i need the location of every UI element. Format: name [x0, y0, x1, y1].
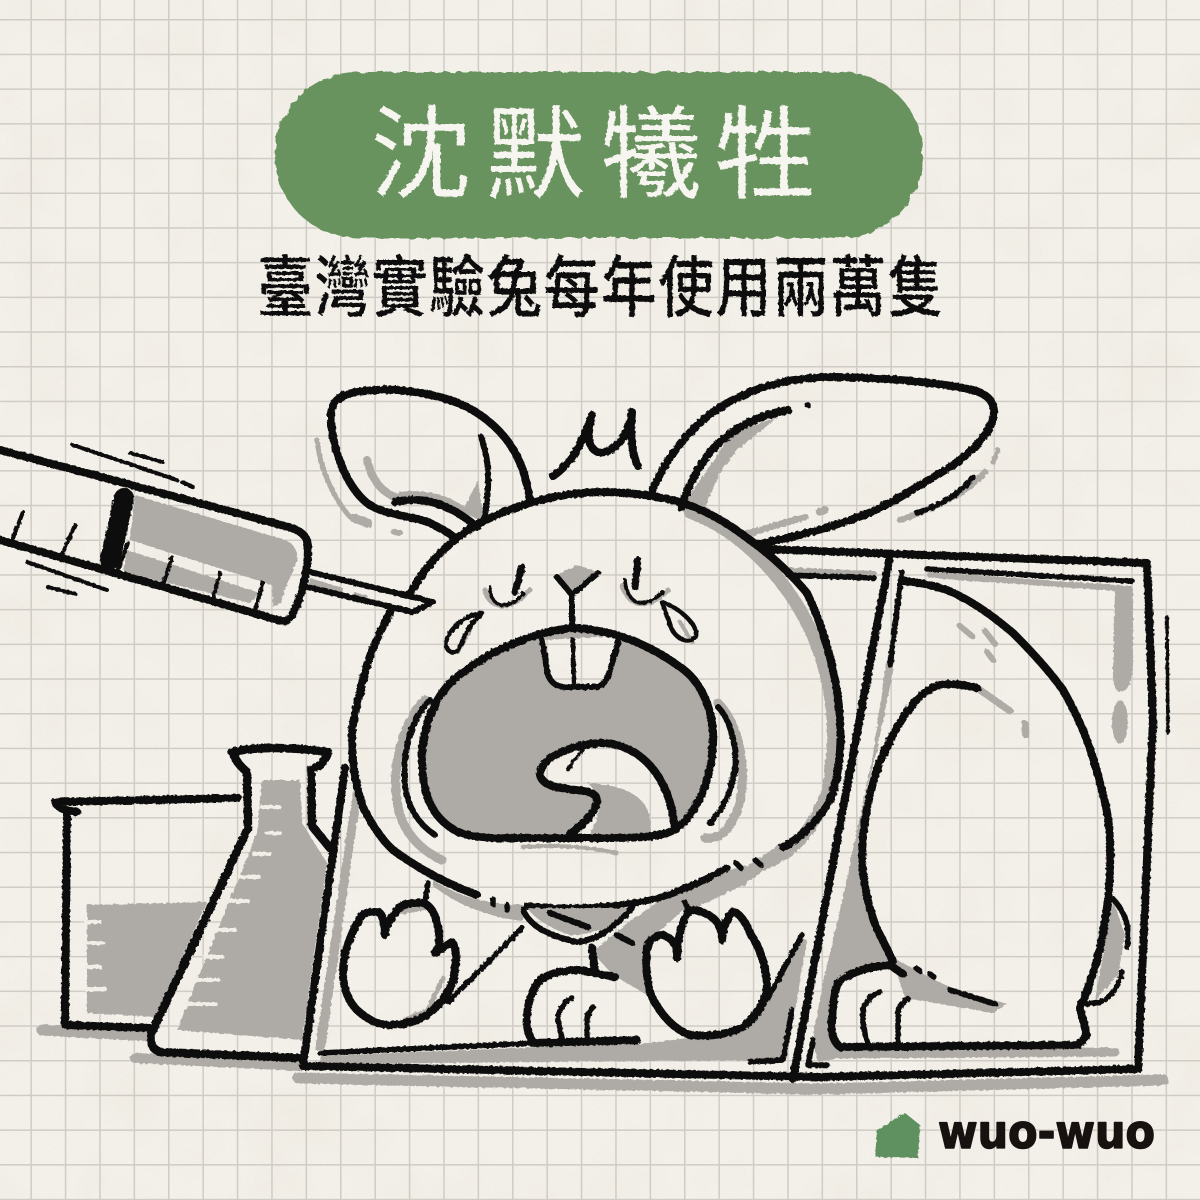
syringe outline [0, 450, 308, 621]
title: 沈默犧牲 [370, 100, 830, 212]
angry mark [553, 412, 638, 476]
box outlines [303, 549, 1153, 1077]
head outline [410, 492, 841, 847]
crying eyes [485, 560, 668, 606]
syringe fill [123, 495, 368, 607]
left paw [343, 883, 522, 1025]
glass box [303, 549, 1168, 1079]
vibration line [1167, 617, 1168, 733]
box shading [315, 570, 1133, 1064]
nose [557, 565, 598, 625]
syringe [0, 445, 433, 621]
tears [446, 602, 696, 652]
rabbit right ear [650, 377, 998, 546]
tongue [540, 743, 675, 834]
teeth [542, 636, 620, 687]
subtitle: 臺灣實驗兔每年使用兩萬隻 [257, 251, 945, 326]
title banner [275, 72, 923, 238]
syringe ticks [13, 512, 263, 610]
rabbit left ear [317, 390, 530, 538]
tail [1087, 899, 1128, 1004]
front foot [527, 948, 637, 1043]
erlenmeyer flask [151, 748, 330, 1058]
head shading [433, 512, 834, 995]
motion lines [27, 445, 193, 594]
right paw [646, 902, 767, 1036]
rabbit head [352, 492, 841, 995]
logo wordmark: wuo-wuo [938, 1105, 1155, 1159]
mouth [422, 628, 713, 838]
beaker [55, 798, 238, 1028]
rabbit body from behind [832, 581, 1128, 1047]
rabbit paws and front foot [343, 883, 767, 1043]
needle [307, 572, 433, 612]
chin [523, 907, 633, 943]
logo [875, 1105, 1155, 1159]
ground shadows [42, 1030, 1163, 1089]
cheek arcs [396, 700, 742, 860]
plunger [110, 498, 124, 560]
icon: house [875, 1113, 920, 1158]
illustration [0, 377, 1168, 1089]
